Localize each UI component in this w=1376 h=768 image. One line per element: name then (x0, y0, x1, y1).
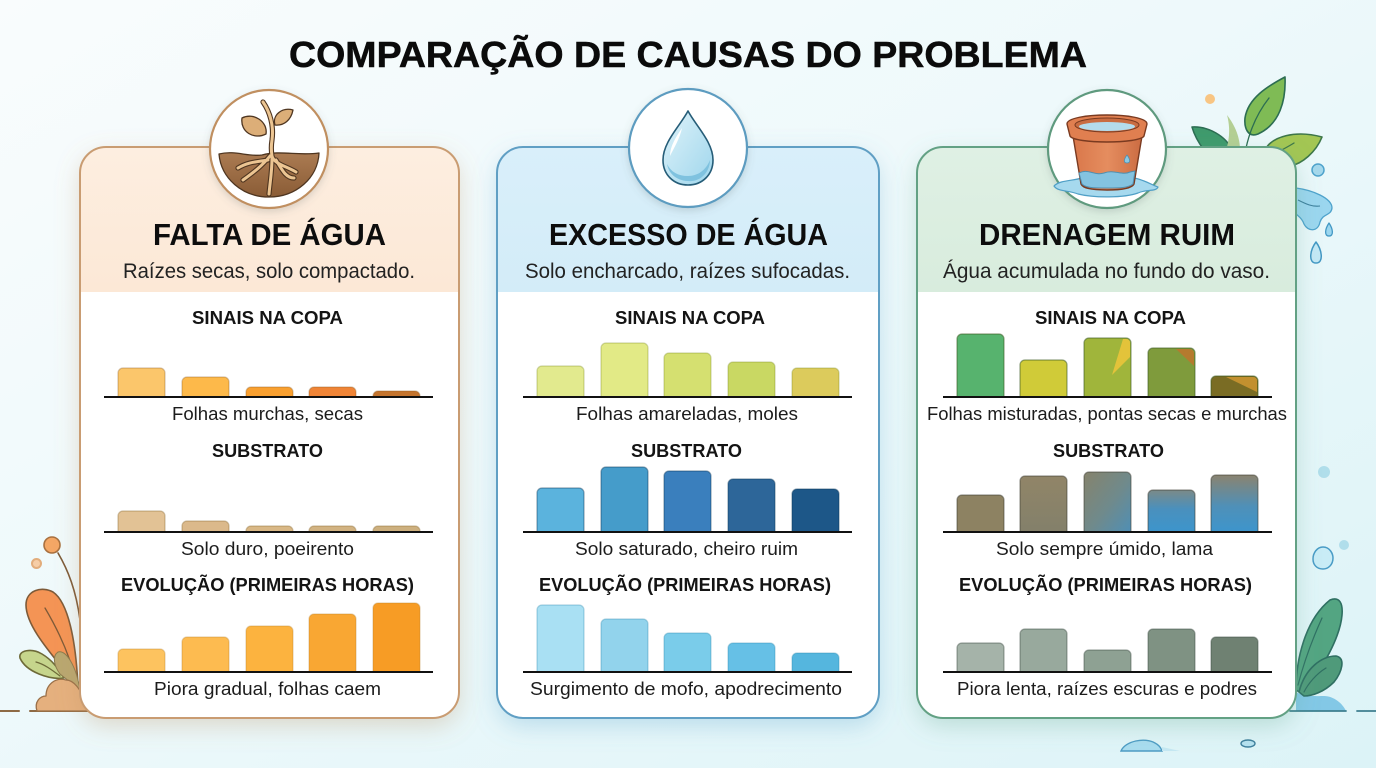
chart: evolução: EVOLUÇÃO (PRIMEIRAS HORAS) (121, 574, 414, 595)
panel header band (80, 147, 459, 292)
icon: pot with water (1048, 90, 1166, 208)
panel: falta de água (80, 90, 459, 718)
subheading: Solo encharcado, raízes sufocadas. (525, 260, 850, 283)
chart: substrato (523, 441, 852, 559)
chart: evolução: EVOLUÇÃO (PRIMEIRAS HORAS) (539, 574, 831, 595)
subheading: Água acumulada no fundo do vaso. (943, 260, 1270, 283)
chart: evolução (104, 574, 433, 699)
panel: drenagem ruim (917, 90, 1296, 718)
chart: sinais na copa (104, 308, 433, 424)
panel header band (497, 147, 879, 292)
title: COMPARAÇÃO DE CAUSAS DO PROBLEMA (289, 33, 1087, 75)
chart: evolução: Surgimento de mofo, apodrecimento (530, 679, 842, 699)
chart: sinais na copa (523, 308, 852, 424)
decoration: left plant (0, 537, 95, 711)
chart: substrato: Solo duro, poeirento (181, 539, 354, 559)
chart: evolução: Piora lenta, raízes escuras e podres (957, 679, 1257, 699)
subheading: Raízes secas, solo compactado. (123, 260, 415, 283)
chart: evolução: Piora gradual, folhas caem (154, 679, 381, 699)
chart: sinais na copa (927, 308, 1287, 424)
chart: substrato: SUBSTRATO (212, 441, 323, 461)
chart: sinais na copa: SINAIS NA COPA (1035, 308, 1186, 328)
chart: sinais na copa: Folhas amareladas, moles (576, 404, 798, 424)
chart: evolução: EVOLUÇÃO (PRIMEIRAS HORAS) (959, 574, 1252, 595)
icon: plant roots (210, 90, 328, 208)
heading: EXCESSO DE ÁGUA (549, 217, 828, 252)
heading: FALTA DE ÁGUA (153, 217, 386, 252)
chart: substrato (943, 441, 1272, 559)
chart: substrato: Solo sempre úmido, lama (996, 539, 1214, 559)
chart: sinais na copa: SINAIS NA COPA (615, 308, 765, 328)
chart: substrato (104, 441, 433, 559)
icon: water drop (629, 89, 747, 207)
panel header band (917, 147, 1296, 292)
decoration: bottom puddles (1121, 740, 1255, 751)
panel: excesso de água (497, 89, 879, 718)
heading: DRENAGEM RUIM (979, 217, 1235, 252)
chart: substrato: Solo saturado, cheiro ruim (575, 539, 798, 559)
chart: evolução (943, 574, 1272, 699)
chart: evolução (523, 574, 852, 699)
decoration: top right leaves (1192, 77, 1322, 166)
chart: sinais na copa: Folhas misturadas, pontas secas e murchas (927, 404, 1287, 424)
chart: substrato: SUBSTRATO (631, 441, 742, 461)
decoration: water splash and drops (1296, 164, 1349, 569)
chart: sinais na copa: Folhas murchas, secas (172, 404, 363, 424)
decoration: right plant (1290, 599, 1376, 711)
chart: sinais na copa: SINAIS NA COPA (192, 308, 343, 328)
chart: substrato: SUBSTRATO (1053, 441, 1164, 461)
